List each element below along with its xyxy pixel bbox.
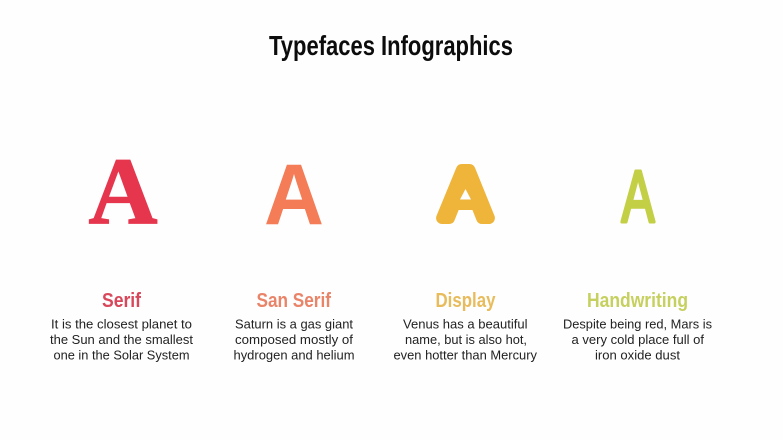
panel: serif	[50, 138, 194, 362]
heading: display: Display	[436, 290, 496, 312]
text block: display description	[394, 318, 538, 362]
text block: san serif description: composed mostly of	[235, 333, 354, 347]
heading: handwriting: Handwriting	[587, 290, 688, 312]
text block: handwriting description: a very cold place full of	[572, 333, 705, 347]
text block: handwriting description: iron oxide dust	[595, 348, 681, 362]
text block: display description: even hotter than Mercury	[394, 348, 538, 362]
icon: handwriting letter A: A	[622, 157, 655, 238]
text block: san serif description: Saturn is a gas giant	[235, 318, 354, 332]
text block: serif description: one in the Solar System	[54, 348, 190, 362]
text block: display description: name, but is also hot,	[405, 333, 527, 347]
icon: display letter A: A	[442, 155, 489, 233]
text block: serif description: It is the closest planet to	[51, 318, 192, 332]
text block: san serif description: hydrogen and helium	[234, 348, 354, 362]
text block: handwriting description: Despite being red, Mars is	[563, 318, 712, 332]
icon: sans serif letter A: A	[264, 147, 324, 243]
heading: san serif: San Serif	[256, 290, 331, 312]
heading: serif: Serif	[102, 290, 141, 312]
panel: handwriting	[563, 157, 712, 362]
text block: display description: Venus has a beautiful	[403, 318, 528, 332]
text block: serif description: the Sun and the smallest	[50, 333, 194, 347]
panel: san serif	[234, 147, 354, 362]
panel: display	[394, 155, 538, 362]
icon: serif letter A: A	[88, 138, 158, 244]
text block: serif description	[50, 318, 194, 362]
text block: san serif description	[234, 318, 354, 362]
text block: handwriting description	[563, 318, 712, 362]
title: Typefaces Infographics	[269, 30, 513, 61]
